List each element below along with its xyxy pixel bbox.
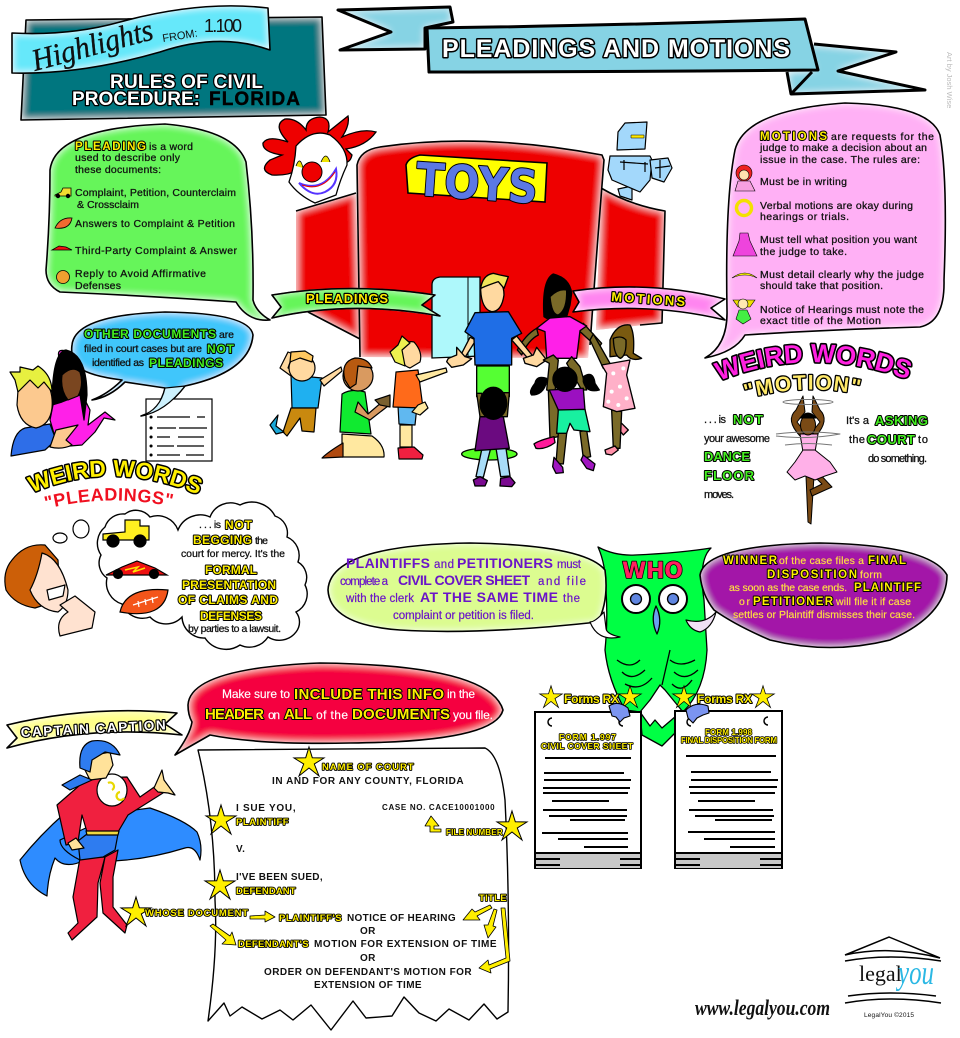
panel: winner final disposition bubble: of the case files a [779,555,864,567]
form: civil cover sheet: CIVIL COVER SHEET [541,741,634,751]
panel: plaintiffs and petitioners bubble: complete a [340,576,389,588]
panel: include this info bubble: of the [316,708,348,722]
document text: OR [360,953,376,964]
text: not dance floor moves: NOT [733,412,763,427]
forms rx label right: Forms RX [697,692,752,706]
pleadings ribbon: PLEADINGS [306,291,388,306]
document text: I'VE BEEN SUED, [236,872,323,883]
header: highlights banner [12,6,326,120]
panel: winner final disposition bubble: settles or Plaintiff dismisses their case. [733,609,915,621]
panel: include this info bubble: in the [447,687,475,701]
panel: motions bubble: are requests for the [831,131,934,143]
panel: other documents bubble: identified as [92,357,144,369]
panel: other documents bubble [72,312,253,416]
panel: winner final disposition bubble: as soon as the case ends. [729,582,847,594]
panel: pleading definition bubble: PLEADING [75,141,146,153]
panel: include this info bubble: INCLUDE THIS INFO [294,686,444,703]
icon: basketball [56,270,70,284]
panel: pleading definition bubble: Complaint, Petition, Counterclaim [75,187,236,199]
cloud text: DEFENSES [200,609,262,623]
text: asking the court: the [849,434,865,446]
form: final disposition form [675,711,782,868]
panel: motions bubble: issue in the case. The rules are: [760,154,920,166]
panel: winner final disposition bubble: WINNER [723,555,778,567]
owl wings [590,612,716,638]
text: not dance floor moves: . . . is [704,414,726,426]
panel: winner final disposition bubble: DISPOSITION [767,569,857,581]
panel: plaintiffs and petitioners bubble [328,543,606,631]
panel: winner final disposition bubble: FINAL [868,555,906,567]
panel: motions bubble: Verbal motions are okay during [760,200,913,212]
form: civil cover sheet: FORM 1.997 [559,732,616,742]
icon: red car [52,246,72,250]
document sheet [146,399,212,461]
forms rx label right [673,686,774,708]
cloud text: by parties to a lawsuit. [188,623,281,635]
header: highlights banner: Highlights [27,12,157,78]
panel: motions bubble: Must be in writing [760,176,847,188]
panel: winner final disposition bubble [700,543,947,648]
ballerina [776,396,840,524]
panel: pleading definition bubble: Defenses [75,280,121,292]
yellow arrows on document [210,816,510,973]
cloud text: the [255,535,268,547]
icon: dress [733,233,757,256]
document text [236,762,507,991]
panel: other documents bubble: are [219,329,234,341]
weird words heading left: WEIRD WORDS [24,458,204,494]
logo: legalyou: LegalYou ©2015 [864,1011,914,1019]
cloud text: BEGGING [193,533,252,547]
website handwriting: www.legalyou.com [695,995,830,1020]
header: pleadings and motions ribbon: PLEADINGS AND MOTIONS [442,35,790,63]
panel: motions bubble: Notice of Hearings must note the [760,304,924,316]
document text: TITLE [479,893,507,904]
icon: doll [735,165,755,191]
text: asking the court: ASKING [875,413,928,428]
pleadings ribbon [272,288,440,318]
clown [263,116,376,203]
panel: include this info bubble: on [268,708,280,722]
illustration: boy in green shirt kneeling [322,358,390,458]
icon: yellow truck [55,188,71,198]
panel: pleading definition bubble: Reply to Avoid Affirmative [75,268,206,280]
girl in polka dot dress [590,325,642,455]
football [120,589,168,614]
panel: plaintiffs and petitioners bubble: complaint or petition is filed. [393,610,534,622]
panel: plaintiffs and petitioners bubble: PETITIONERS [457,555,553,571]
panel: other documents bubble: filed in court cases but are [84,343,202,355]
text: asking the court [846,413,928,465]
cloud text: FORMAL [205,563,257,577]
illustration: boy in orange shirt pointing [390,336,447,459]
panel: plaintiffs and petitioners bubble: and [434,559,454,571]
text: not dance floor moves [704,412,770,501]
text: asking the court: It's a [846,415,870,427]
document text: DEFENDANT'S [238,939,309,950]
logo: legalyou: you [896,955,934,992]
text: asking the court: do something. [868,453,927,465]
motions ribbon: MOTIONS [611,289,686,309]
owl [598,547,711,746]
form: final disposition form: FINAL DISPOSITION FORM [681,736,777,745]
header: highlights banner: PROCEDURE: [72,89,200,110]
text: asking the court: to [918,434,928,446]
robot [608,122,672,200]
form: final disposition form: FORM 1.998 [705,728,753,737]
document text: ORDER ON DEFENDANT'S MOTION FOR [264,967,472,978]
panel: plaintiffs and petitioners bubble: the [563,593,580,605]
panel: motions bubble: exact title of the Motion [760,315,881,327]
redraw bubble tail over document [141,386,185,416]
document text: I SUE YOU, [236,803,296,814]
document text: NOTICE OF HEARING [347,913,456,924]
captain caption ribbon [7,711,182,748]
logo: legalyou: legal [859,961,902,986]
panel: plaintiffs and petitioners bubble: PLAINTIFFS [346,555,430,571]
motions ribbon [573,287,725,320]
icon: football [55,218,72,228]
toys sign: TOYS [414,152,540,214]
superhero captain caption [20,741,201,940]
document text: FILE NUMBER [446,828,503,837]
form: civil cover sheet [535,712,641,868]
panel: other documents bubble: OTHER DOCUMENTS [84,327,216,341]
stars on document [205,747,527,899]
header: highlights banner: FLORIDA [209,89,300,110]
yellow truck [103,520,149,547]
panel: include this info bubble: you file. [453,708,493,722]
panel: motions bubble [705,103,945,358]
cloud text: . . . is [199,519,221,531]
panel: pleading definition bubble: & Crossclaim [77,199,139,211]
text: not dance floor moves: moves. [704,489,734,501]
text: asking the court: COURT [867,432,915,447]
document text: MOTION FOR EXTENSION OF TIME [314,939,497,950]
panel: other documents bubble: PLEADINGS [149,356,223,370]
panel: pleading definition bubble: Third-Party Complaint & Answer [75,245,238,257]
document text: EXTENSION OF TIME [314,980,422,991]
art credit: Art by Josh Wise [945,52,954,108]
cloud text [178,518,285,635]
panel: pleading definition bubble: these documents: [75,164,161,176]
thinking person [5,520,95,636]
document text: V. [236,844,245,855]
text: not dance floor moves: your awesome [704,433,770,445]
weird words heading right: "MOTION" [742,374,862,397]
document text: OR [360,926,376,937]
cloud text: PRESENTATION [182,578,276,592]
forms rx label left [540,686,641,708]
panel: motions bubble: should take that position. [760,280,883,292]
document text: PLAINTIFF'S [279,913,342,924]
panel: include this info bubble: DOCUMENTS [352,706,450,723]
panel: include this info bubble [175,663,503,755]
red car [106,561,167,578]
panel: motions bubble: judge to make a decision about an [759,142,927,154]
document text: IN AND FOR ANY COUNTY, FLORIDA [272,776,464,787]
whose document label: WHOSE DOCUMENT [145,908,248,919]
icon: tiara [732,273,757,278]
owl feet [609,703,709,723]
panel: winner final disposition bubble: or [739,596,750,608]
header: highlights banner: RULES OF CIVIL [110,72,263,93]
panel: include this info bubble: ALL [284,706,312,723]
panel: motions bubble: hearings or trials. [760,211,849,223]
text: not dance floor moves: DANCE [704,449,750,464]
header: highlights banner: 1.100 [204,16,242,36]
toy building [296,141,665,358]
cloud text: OF CLAIMS AND [178,593,278,607]
panel: pleading definition bubble: used to describe only [75,152,181,164]
header: highlights banner: FROM: [162,28,198,45]
panel: plaintiffs and petitioners bubble: and file [538,576,586,588]
illustration: central group of children [447,273,642,487]
panel: winner final disposition bubble: PLAINTIFF [854,582,921,594]
girl in pink shirt [517,274,602,449]
boy in blue shirt [447,273,547,397]
panel: plaintiffs and petitioners bubble: CIVIL COVER SHEET [398,572,530,588]
panel: motions bubble: Must detail clearly why the judge [760,269,924,281]
text: not dance floor moves: FLOOR [704,468,755,483]
thought cloud [97,502,307,649]
weird words heading left: "PLEADINGS" [44,488,174,507]
panel: plaintiffs and petitioners bubble: AT THE SAME TIME [420,589,558,605]
document text: CASE NO. CACE10001000 [382,803,495,812]
panel: winner final disposition bubble: will file it if case [835,596,911,608]
panel: plaintiffs and petitioners bubble: with the clerk [345,593,414,605]
whose document label [121,897,248,926]
weird words heading right: WEIRD WORDS [711,342,913,381]
document text: DEFENDANT [236,886,296,897]
panel: include this info bubble: HEADER [205,706,264,723]
doors [432,277,480,358]
paper: sample document header [198,747,527,1030]
panel: other documents bubble: NOT [207,342,235,356]
cloud text: NOT [225,518,253,532]
panel: winner final disposition bubble: PETITIONER [753,596,834,608]
header: pleadings and motions ribbon [338,7,925,94]
panel: motions bubble: the judge to take. [760,246,847,258]
panel: motions bubble: Must tell what position you want [760,234,917,246]
panel: motions bubble: MOTIONS [760,131,827,143]
panel: pleading definition bubble [46,124,270,320]
child from behind with purple dress [462,387,517,487]
forms rx label left: Forms RX [564,692,619,706]
panel: pleading definition bubble: is a word [149,141,193,153]
captain caption ribbon: CAPTAIN CAPTION [20,717,166,740]
panel: winner final disposition bubble: form [860,569,882,581]
document text: PLAINTIFF [236,817,289,828]
illustration: boy and girl talking [10,350,115,456]
panel: include this info bubble: Make sure to [222,687,290,701]
icon: green doll [733,299,755,324]
panel: pleading definition bubble: Answers to Complaint & Petition [75,218,235,230]
document text: NAME OF COURT [322,762,414,773]
illustration: boy in blue shirt kneeling [270,351,342,436]
girl with pigtails [531,355,599,473]
cloud text: court for mercy. It's the [181,548,285,560]
icon: necklace [736,200,752,216]
panel: plaintiffs and petitioners bubble: must [557,559,582,571]
owl: WHO [622,559,683,584]
logo: legalyou [845,937,941,1019]
